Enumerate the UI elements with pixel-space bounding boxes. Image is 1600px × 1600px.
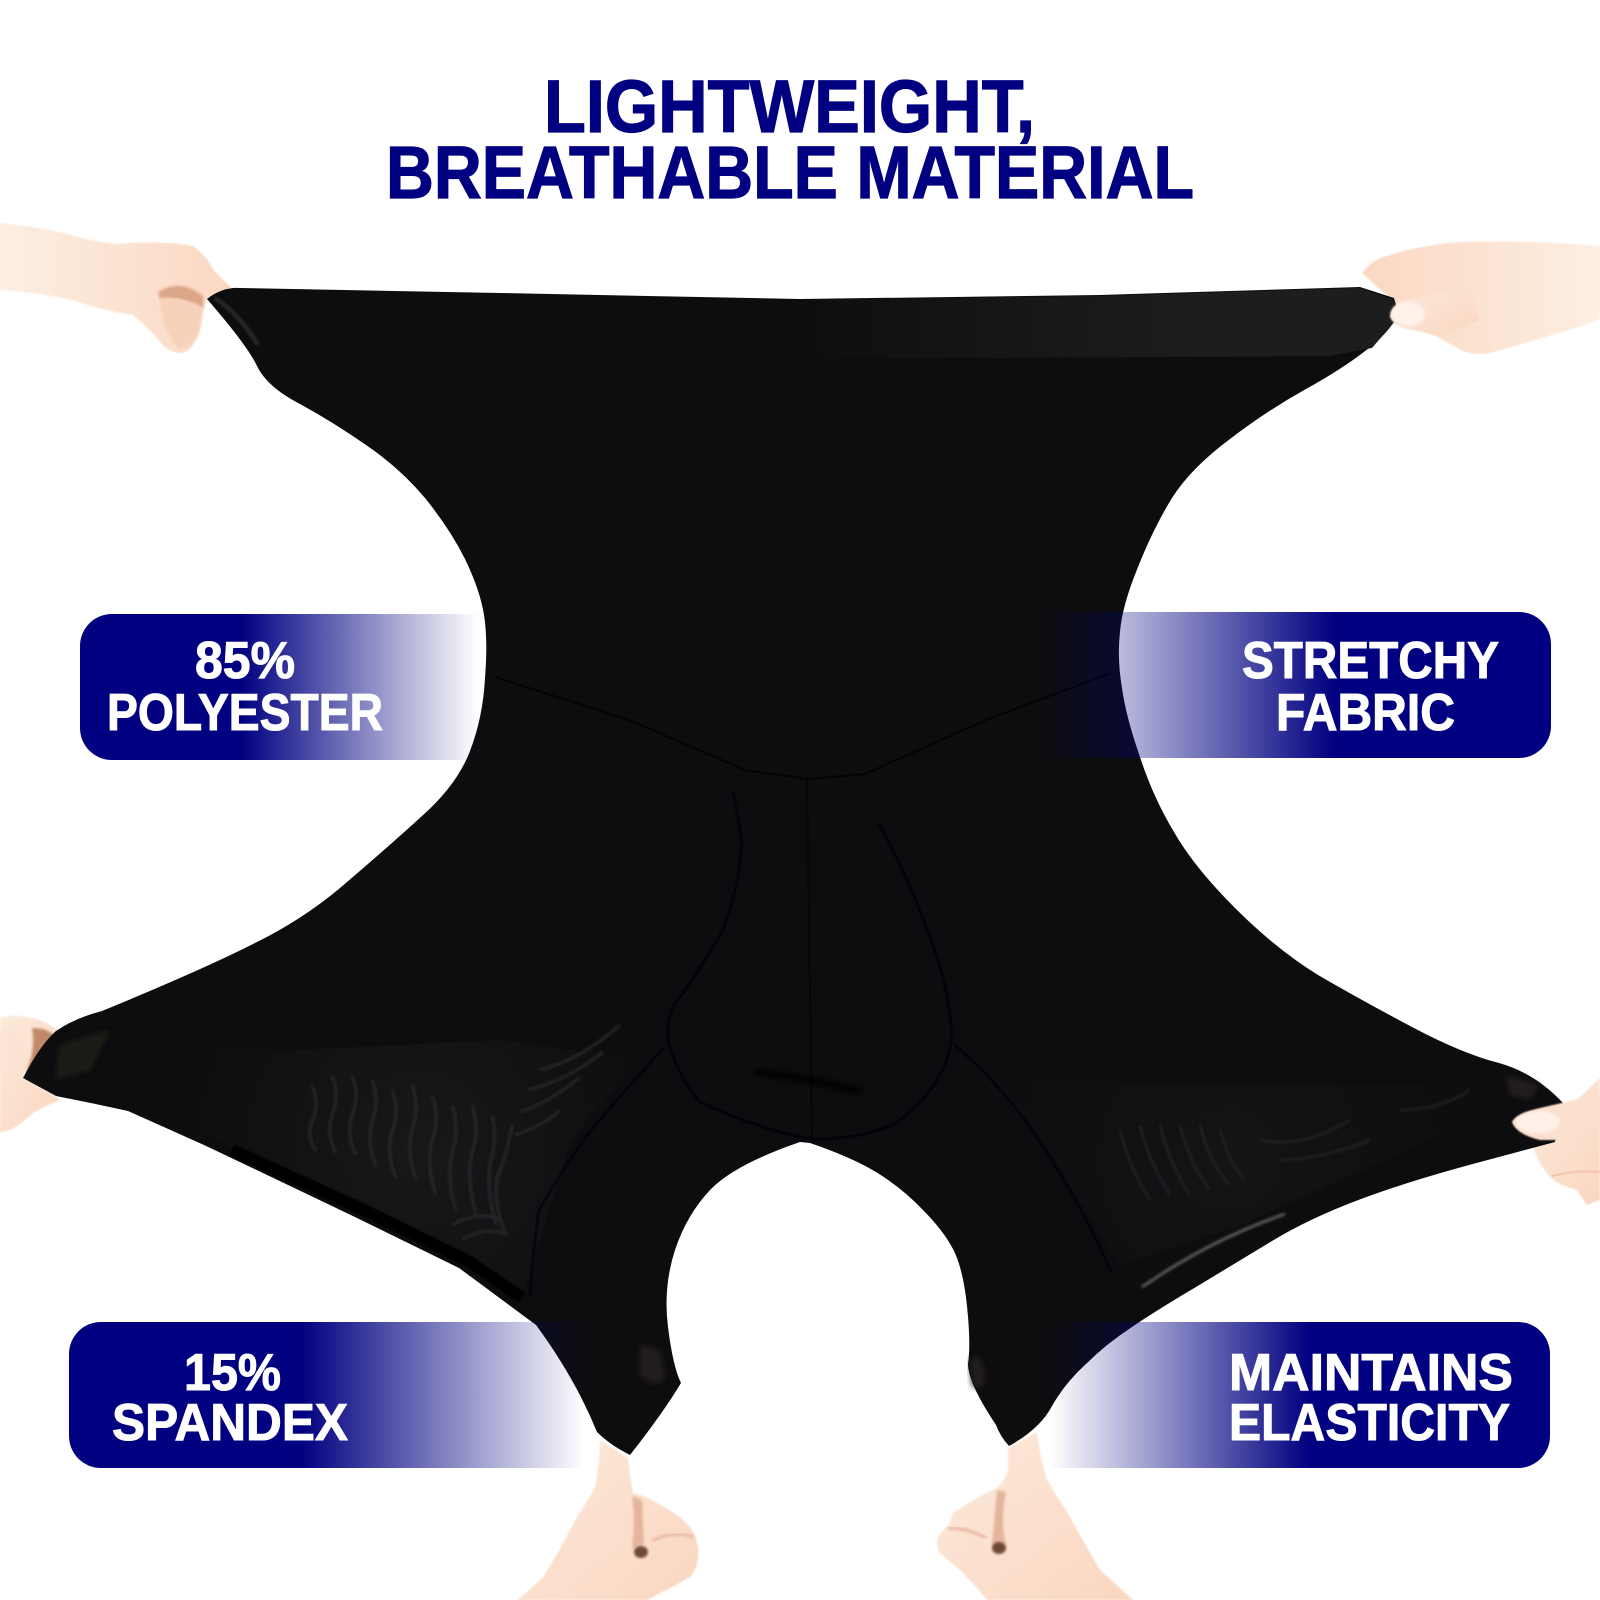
callout: 15% spandex: 15% — [184, 1344, 281, 1402]
hand: lower right — [1527, 1078, 1600, 1205]
hand: top right — [1362, 242, 1600, 354]
waistband left fold — [215, 298, 258, 345]
callout: 85% polyester: 85% — [195, 632, 295, 690]
mesh highlight — [1142, 1214, 1285, 1287]
callout: 85% polyester — [80, 614, 490, 760]
hand: lower left — [0, 1016, 60, 1132]
callout: 85% polyester: POLYESTER — [107, 684, 383, 742]
waistband — [780, 288, 1396, 358]
title — [386, 65, 1194, 214]
thumb: lower right — [1512, 1095, 1600, 1140]
seam: left leg — [530, 1048, 664, 1297]
seam: pouch — [668, 791, 952, 1139]
seam: centre — [807, 779, 812, 1139]
mesh panel: left — [70, 1025, 640, 1298]
hand: bottom right — [937, 1432, 1133, 1600]
sheer leg tips — [640, 1345, 665, 1383]
callout: maintains elasticity — [1050, 1322, 1550, 1468]
nail: top right — [1391, 302, 1425, 326]
garment silhouette — [23, 287, 1563, 1455]
seam: yoke — [495, 673, 1111, 779]
hand: bottom left — [517, 1440, 698, 1600]
title: LIGHTWEIGHT, — [544, 65, 1035, 148]
seam: right leg — [954, 1044, 1111, 1272]
thumbs over garment — [1390, 290, 1600, 1140]
garment: black stretched shorts — [23, 287, 1563, 1455]
pouch crease — [754, 1072, 862, 1092]
callout: stretchy fabric: FABRIC — [1276, 684, 1455, 742]
callout: maintains elasticity: MAINTAINS — [1229, 1344, 1513, 1402]
hand: top left — [0, 223, 232, 353]
callout: stretchy fabric — [1040, 612, 1551, 758]
callout: stretchy fabric: STRETCHY — [1242, 632, 1499, 690]
mesh hem band — [232, 1150, 522, 1298]
thumb: top right — [1390, 290, 1480, 336]
callout: 15% spandex: SPANDEX — [112, 1394, 348, 1452]
nail: lower right — [1516, 1111, 1560, 1133]
mesh panel: right — [980, 1075, 1490, 1287]
callout: maintains elasticity: ELASTICITY — [1229, 1394, 1510, 1452]
callout: 15% spandex — [69, 1322, 600, 1468]
title: BREATHABLE MATERIAL — [386, 131, 1194, 214]
